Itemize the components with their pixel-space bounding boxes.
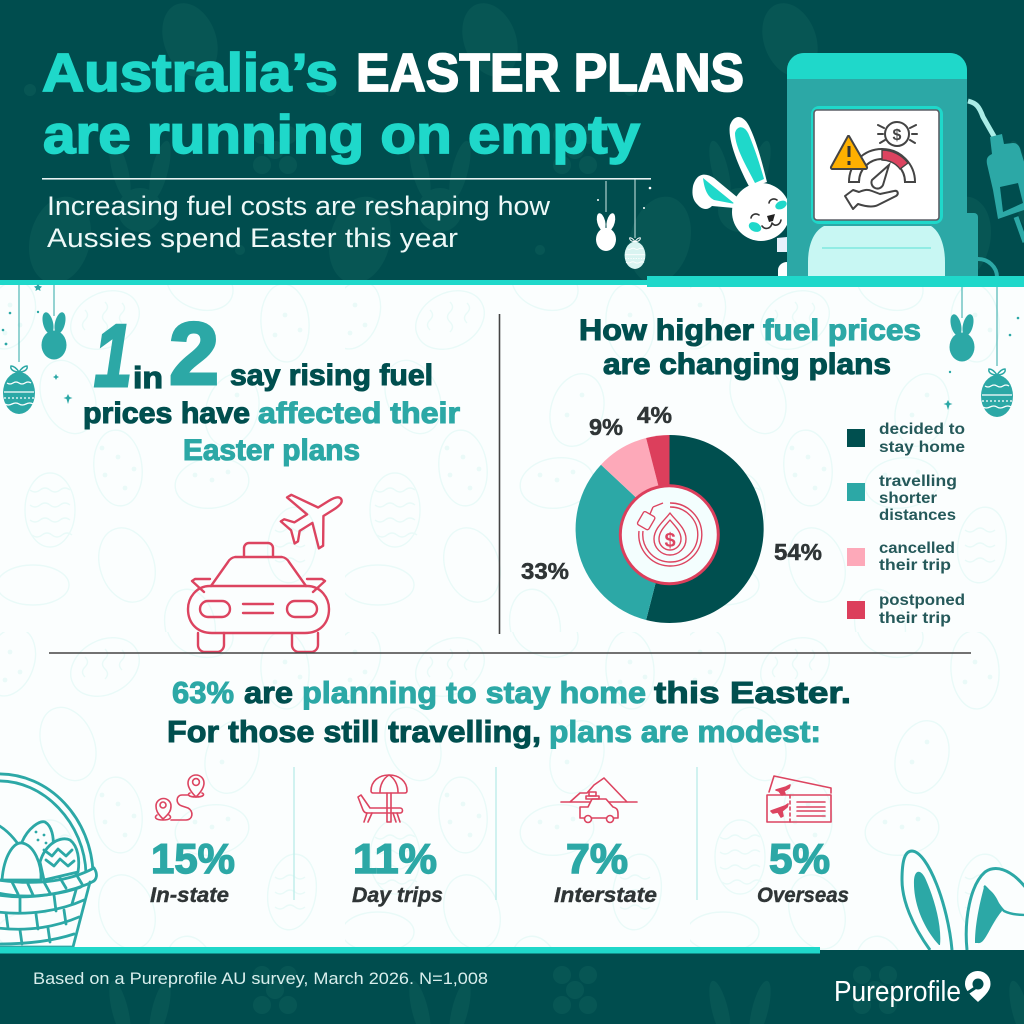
stat: 1 in 2: 2 [169, 304, 219, 403]
stat column: overseas: Overseas [757, 884, 849, 907]
source note: Based on a Pureprofile AU survey, March 2026. N=1,008 [33, 969, 488, 988]
chart value labels [521, 402, 822, 584]
stat: 1 in 2: 1 [94, 306, 132, 405]
icon: fuel drop [637, 503, 702, 566]
icon: sun lounger [358, 775, 407, 822]
panel: header banner [0, 0, 1024, 281]
stat column: interstate: Interstate [554, 884, 657, 907]
hanging ornaments: left [2, 284, 73, 414]
chart legend: decided to [879, 421, 965, 438]
title [42, 43, 744, 165]
panel: footer [0, 947, 1024, 1024]
heading: staying home: plans are modest: [549, 714, 821, 749]
heading: staying home [167, 675, 851, 749]
chart legend: cancelled [879, 540, 955, 557]
chart legend: stay home [879, 439, 965, 456]
chart legend: travelling [879, 473, 957, 490]
heading: staying home: this Easter. [654, 675, 851, 710]
heading: staying home: planning to stay home [302, 675, 646, 710]
title: are running on empty [43, 105, 640, 165]
stat column: in-state [150, 775, 235, 907]
heading: staying home: For those still travelling, [167, 714, 541, 749]
subtitle [42, 178, 651, 253]
title: Australia’s [42, 43, 338, 103]
icon: taxi car [188, 543, 329, 652]
heading: staying home: are [244, 675, 293, 710]
icon: airplane [272, 474, 357, 558]
icon: route pins [155, 775, 204, 820]
icon: fuel hose and nozzle [967, 101, 1024, 277]
chart legend: distances [879, 507, 956, 524]
icon: car and mountain [561, 778, 637, 822]
icon: fuel drop: $ [664, 530, 676, 552]
chart legend: shorter [879, 490, 937, 507]
stat column: day trips: Day trips [352, 884, 443, 907]
heading: how fuel prices change plans: How higher [579, 314, 754, 347]
stat: 1 in 2: Easter plans [183, 434, 360, 467]
stat column: day trips: 11% [353, 835, 437, 882]
chart legend: their trip [879, 610, 951, 627]
illustration: easter basket [0, 774, 96, 947]
donut chart [576, 435, 764, 623]
title: EASTER PLANS [356, 43, 744, 103]
icon: plane tickets [767, 776, 831, 822]
stat: 1 in 2: say rising fuel [230, 359, 433, 392]
stat column: in-state: In-state [150, 884, 229, 907]
icon: fuel pump [787, 53, 967, 278]
chart value labels: 4% [637, 402, 672, 428]
icon: screen with gauge and warning: $ [893, 127, 902, 144]
stat column: interstate: 7% [566, 835, 628, 882]
heading: how fuel prices change plans [579, 314, 921, 381]
subtitle: Increasing fuel costs are reshaping how [47, 191, 551, 221]
chart value labels: 54% [774, 539, 822, 565]
stat: 1 in 2: affected their [258, 397, 460, 430]
heading: how fuel prices change plans: are changing plans [603, 348, 891, 381]
illustration: bunny ears bottom right [902, 851, 1024, 950]
chart legend: their trip [879, 557, 951, 574]
stat column: overseas: 5% [769, 835, 830, 882]
chart legend [847, 421, 965, 627]
stat column: overseas [757, 776, 849, 907]
stat column: interstate [554, 778, 657, 907]
stat column: in-state: 15% [151, 835, 235, 882]
stat column: day trips [352, 775, 443, 907]
icon: screen with gauge and warning [814, 110, 939, 220]
stat: 1 in 2 [83, 304, 460, 467]
chart value labels: 9% [589, 414, 623, 440]
hanging ornaments: header [595, 179, 651, 269]
heading: how fuel prices change plans: fuel prices [763, 314, 921, 347]
heading: staying home: 63% [172, 675, 234, 710]
accent bar under header [0, 276, 1024, 287]
icon: bunny peeking [692, 117, 790, 277]
chart legend: postponed [879, 592, 965, 609]
logo: Pureprofile: Pureprofile [834, 976, 961, 1008]
hanging ornaments: right [944, 287, 1019, 417]
stat: 1 in 2: prices have [83, 397, 250, 430]
stat: 1 in 2: in [133, 360, 163, 395]
subtitle: Aussies spend Easter this year [47, 223, 458, 253]
chart value labels: 33% [521, 558, 569, 584]
